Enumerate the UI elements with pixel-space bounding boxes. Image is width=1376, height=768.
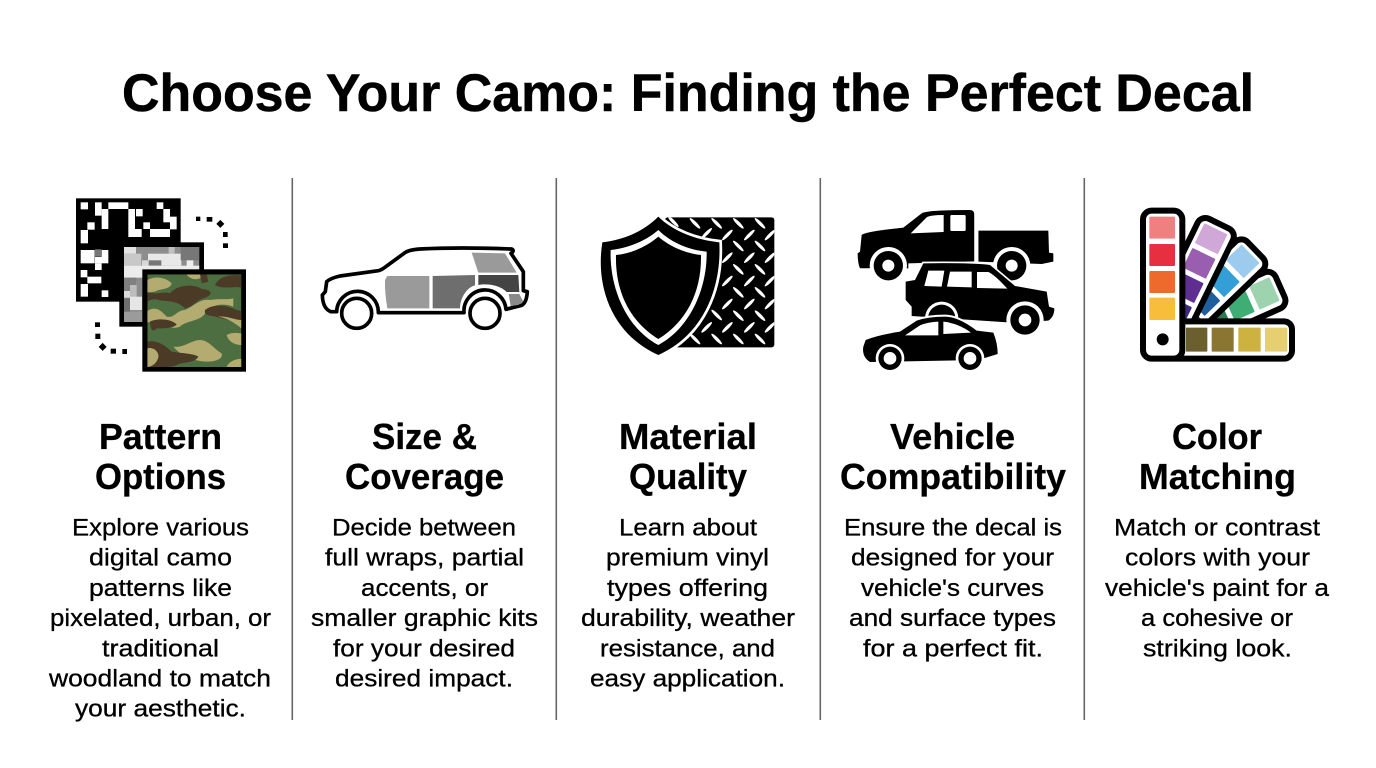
- text: size description: smaller graphic kits: [311, 605, 538, 632]
- icon: SUV with wrap panels: [322, 248, 527, 328]
- text: vehicle description: [844, 514, 1062, 662]
- text: pattern description: woodland to match: [48, 666, 271, 692]
- text: vehicle description: vehicle's curves: [861, 575, 1044, 602]
- heading: size and coverage: [345, 416, 504, 497]
- heading: pattern options: [95, 416, 226, 497]
- text: material description: types offering: [607, 575, 768, 602]
- heading: vehicle compatibility: [840, 416, 1066, 497]
- title: Choose Your Camo: Finding the Perfect Decal: [122, 64, 1254, 123]
- text: color description: colors with your: [1125, 545, 1310, 572]
- text: vehicle description: and surface types: [849, 605, 1056, 632]
- text: pattern description: patterns like: [89, 575, 232, 602]
- text: pattern description: your aesthetic.: [75, 696, 246, 723]
- text: vehicle description: designed for your: [851, 545, 1054, 572]
- text: size description: [311, 514, 538, 692]
- heading: material quality: Quality: [629, 456, 747, 497]
- panel: vehicle compatibility: [840, 210, 1066, 662]
- text: vehicle description: for a perfect fit.: [863, 635, 1043, 662]
- heading: color matching: Matching: [1139, 456, 1296, 497]
- text: color description: a cohesive or: [1141, 605, 1293, 632]
- text: size description: for your desired: [333, 635, 515, 662]
- text: size description: Decide between: [332, 514, 516, 542]
- text: vehicle description: Ensure the decal is: [844, 514, 1062, 542]
- icon: layered camo pattern swatches: [76, 198, 246, 372]
- heading: vehicle compatibility: Vehicle: [890, 416, 1015, 457]
- heading: pattern options: Options: [95, 456, 226, 497]
- panel: material quality: [581, 215, 795, 692]
- icon: shield over diamond plate: [601, 215, 776, 355]
- heading: material quality: [619, 416, 757, 497]
- text: pattern description: traditional: [102, 635, 219, 662]
- pickup truck: [845, 210, 1053, 284]
- text: pattern description: digital camo: [89, 545, 232, 572]
- text: color description: [1105, 514, 1330, 662]
- text: size description: full wraps, partial: [325, 545, 524, 572]
- text: pattern description: Explore various: [72, 514, 249, 542]
- text: material description: durability, weather: [581, 605, 795, 632]
- panel: color matching: [1105, 211, 1330, 662]
- sedan: [863, 317, 998, 373]
- panel: pattern options: [48, 198, 271, 723]
- icon: pickup, SUV and sedan: [845, 210, 1054, 373]
- text: material description: premium vinyl: [606, 545, 769, 572]
- text: pattern description: pixelated, urban, or: [50, 605, 271, 632]
- text: size description: desired impact.: [335, 666, 513, 692]
- heading: size and coverage: Coverage: [345, 456, 504, 497]
- heading: pattern options: Pattern: [99, 416, 222, 457]
- heading: color matching: Color: [1172, 416, 1262, 457]
- panel: size and coverage: [311, 248, 538, 692]
- heading: material quality: Material: [619, 416, 757, 457]
- text: size description: accents, or: [361, 575, 488, 602]
- text: pattern description: [48, 514, 271, 723]
- icon: color swatch fan: [1142, 211, 1292, 360]
- text: color description: vehicle's paint for a: [1105, 575, 1330, 602]
- text: material description: easy application.: [590, 666, 785, 692]
- text: material description: Learn about: [619, 514, 757, 542]
- text: material description: [581, 514, 795, 692]
- text: color description: striking look.: [1143, 635, 1292, 662]
- heading: size and coverage: Size &: [372, 416, 477, 457]
- SUV: [906, 263, 1054, 339]
- heading: vehicle compatibility: Compatibility: [840, 456, 1066, 497]
- text: color description: Match or contrast: [1114, 514, 1320, 542]
- heading: color matching: [1139, 416, 1296, 497]
- text: material description: resistance, and: [600, 635, 775, 662]
